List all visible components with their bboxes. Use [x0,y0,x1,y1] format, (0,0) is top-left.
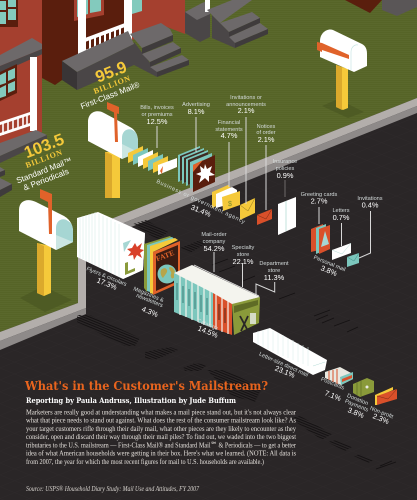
intro text: consider, open and discard their way through their mail piles? To find out, we waded into the two biggest [26,432,297,441]
lower steps [0,167,12,197]
labels: catalog sources: Mail-order [201,232,227,238]
top labels: Bills, invoices [140,105,174,111]
labels: catalog sources: store [268,268,280,274]
label: direct mail: Letter-size direct mail [258,352,309,379]
labels: postcards, donation, non-profit: Donation [346,393,369,407]
envelope: letters [332,243,351,260]
labels: personal mail items: 0.7% [333,213,350,222]
leader lines: personal mail [319,207,370,258]
intro text: your target customers rifle through their daily mail, what other pieces are they likely to encounter as they [26,424,296,433]
labels: catalog sources: store [237,252,249,258]
next house [185,0,417,48]
label: 95.9 billion first-class mail [79,58,141,111]
window: lower left [0,64,17,101]
top labels: statements [215,127,243,133]
window: upper left [0,0,18,27]
mailbox: standard [19,189,73,312]
label: magazines: Magazines & [132,286,165,304]
label: direct mail: 23.1% [274,364,297,380]
railing [85,23,125,54]
insurance policy document [278,197,296,235]
leader lines: catalogs [214,252,275,295]
labels: postcards, donation, non-profit: Payments [344,399,369,414]
label: flyers: Flyers & circulars [85,266,128,288]
mail stack: financial statements: $ [228,201,232,208]
labels: personal mail items: 2.7% [311,196,328,206]
label: 103.5 billion standard mail: & Periodicals [22,167,70,192]
label: 95.9 billion first-class mail: BILLION [92,73,132,96]
magazine stack: FATE [155,248,176,263]
intro text: tributaries to the U.S. mailstream — First-Class Mail® and Standard Mail℠ & Periodicals — to get a better [26,440,296,449]
intro text: idea of what American households were getting in their box. Here's what we learned. (NOTE: All data is [26,449,296,458]
labels: catalog sources: Specialty [232,245,255,251]
mail stack: advertising [178,146,215,192]
mail stack: financial statements [212,185,240,211]
top labels: Insurance [273,159,297,165]
burst [196,164,215,183]
intro text: from 2007, the year for which the most recent figures for mail to U.S. households are available.) [26,457,264,466]
main house [42,0,189,90]
flyers stack [77,212,145,279]
labels: catalog sources: 54.2% [204,244,225,253]
flag [107,102,119,142]
labels: personal mail items [301,192,383,222]
catalog stack [174,265,260,335]
label: flyers: 17.3% [96,276,119,292]
top labels: announcements [226,102,266,108]
columns [78,0,132,61]
label: 103.5 billion standard mail: Standard Mail™ [15,156,73,185]
flag [40,189,52,234]
mailbox: first-class [88,102,138,198]
label: 95.9 billion first-class mail: 95.9 [93,58,129,86]
labels: postcards, donation, non-profit [320,377,394,426]
shadow stripes on the street [77,220,396,469]
window [74,0,104,21]
top labels: Notices [257,124,276,130]
top labels: Advertising [182,102,210,108]
labels: postcards, donation, non-profit: 7.1% [323,388,343,403]
porch roof [0,38,47,73]
labels: postcards, donation, non-profit: 3.8% [346,405,366,420]
envelope: notices yellow [240,198,255,220]
porch block [62,31,134,90]
label: 103.5 billion standard mail: BILLION [24,147,64,170]
labels: postcards, donation, non-profit: Postcards [320,377,345,392]
label: magazines [132,286,165,319]
label: magazines: newsletters [135,293,164,309]
porch railing [0,112,30,136]
label: catalogs: 14.5% [197,324,220,340]
label: business or government agency: Business or government agency [155,179,246,225]
non-profit envelope [375,387,397,405]
magazine stack [144,236,180,295]
label: personal mail: 3.8% [319,263,339,278]
source note: Source: USPS® Household Diary Study: Mail Use and Attitudes, FY 2007 [26,486,200,493]
porch block [0,130,47,163]
stairs [130,23,189,77]
top labels: 8.1% [188,107,205,116]
labels: catalog sources: 11.3% [264,273,285,282]
envelope: invitations [347,253,359,267]
label: personal mail: Personal mail [313,255,346,273]
top labels: 0.9% [277,171,294,180]
top labels [140,95,297,180]
labels: catalog sources: Department [259,261,289,267]
donation pieces [353,378,374,397]
labels: postcards, donation, non-profit: Non-profit [369,406,394,421]
label: 95.9 billion first-class mail: First-Class Mail® [79,80,141,111]
lawn [0,0,417,332]
left house [0,0,47,197]
labels: personal mail items: Invitations [357,196,383,202]
top labels: 12.5% [147,117,168,126]
mailbox: upper right [317,30,367,118]
top labels: 2.1% [258,135,275,144]
intro text [26,408,297,466]
mail stack: bills, invoices or premiums [128,146,177,175]
intro text: Marketers are really good at understanding what makes a mail piece stand out, but it's not always clear [26,408,296,416]
top labels: or premiums [141,112,173,118]
label: magazines: 4.3% [140,304,160,319]
labels: personal mail items: 0.4% [362,200,379,210]
label: business or government agency: 31.4% [190,203,213,219]
labels: catalog sources: company [203,239,226,245]
leader lines: top row [157,117,266,210]
label: 103.5 billion standard mail [15,131,73,192]
intro text: what that piece needs to stand out against. What does the rest of the consumer mailstream look like? As [26,416,296,425]
top labels: Financial [218,120,240,126]
top labels: 2.1% [238,106,255,115]
envelope: notices orange [257,209,272,225]
flag [317,42,349,59]
postcards stack [325,367,353,385]
labels: postcards, donation, non-profit: 2.3% [371,411,391,426]
burst [127,243,144,260]
labels: personal mail items: Letters [332,208,350,214]
label: catalogs: Catalogs [196,318,219,332]
labels: catalog sources [201,232,289,282]
top labels: Invitations or [230,95,262,101]
top labels: 4.7% [221,131,238,140]
title: What's in the Customer's Mailstream? [24,379,268,393]
label: 103.5 billion standard mail: 103.5 [22,131,67,162]
greeting cards [311,224,330,254]
sidewalk curb [0,98,417,350]
byline: Reporting by Paula Andruss, Illustration by Jude Buffum [26,396,236,405]
porch column [30,57,37,131]
top labels: of order [256,130,276,136]
labels: catalog sources: 22.1% [233,257,254,266]
labels: personal mail items: Greeting cards [301,192,338,198]
letter-size direct mail stack [253,328,327,375]
top labels: policies [276,166,295,172]
